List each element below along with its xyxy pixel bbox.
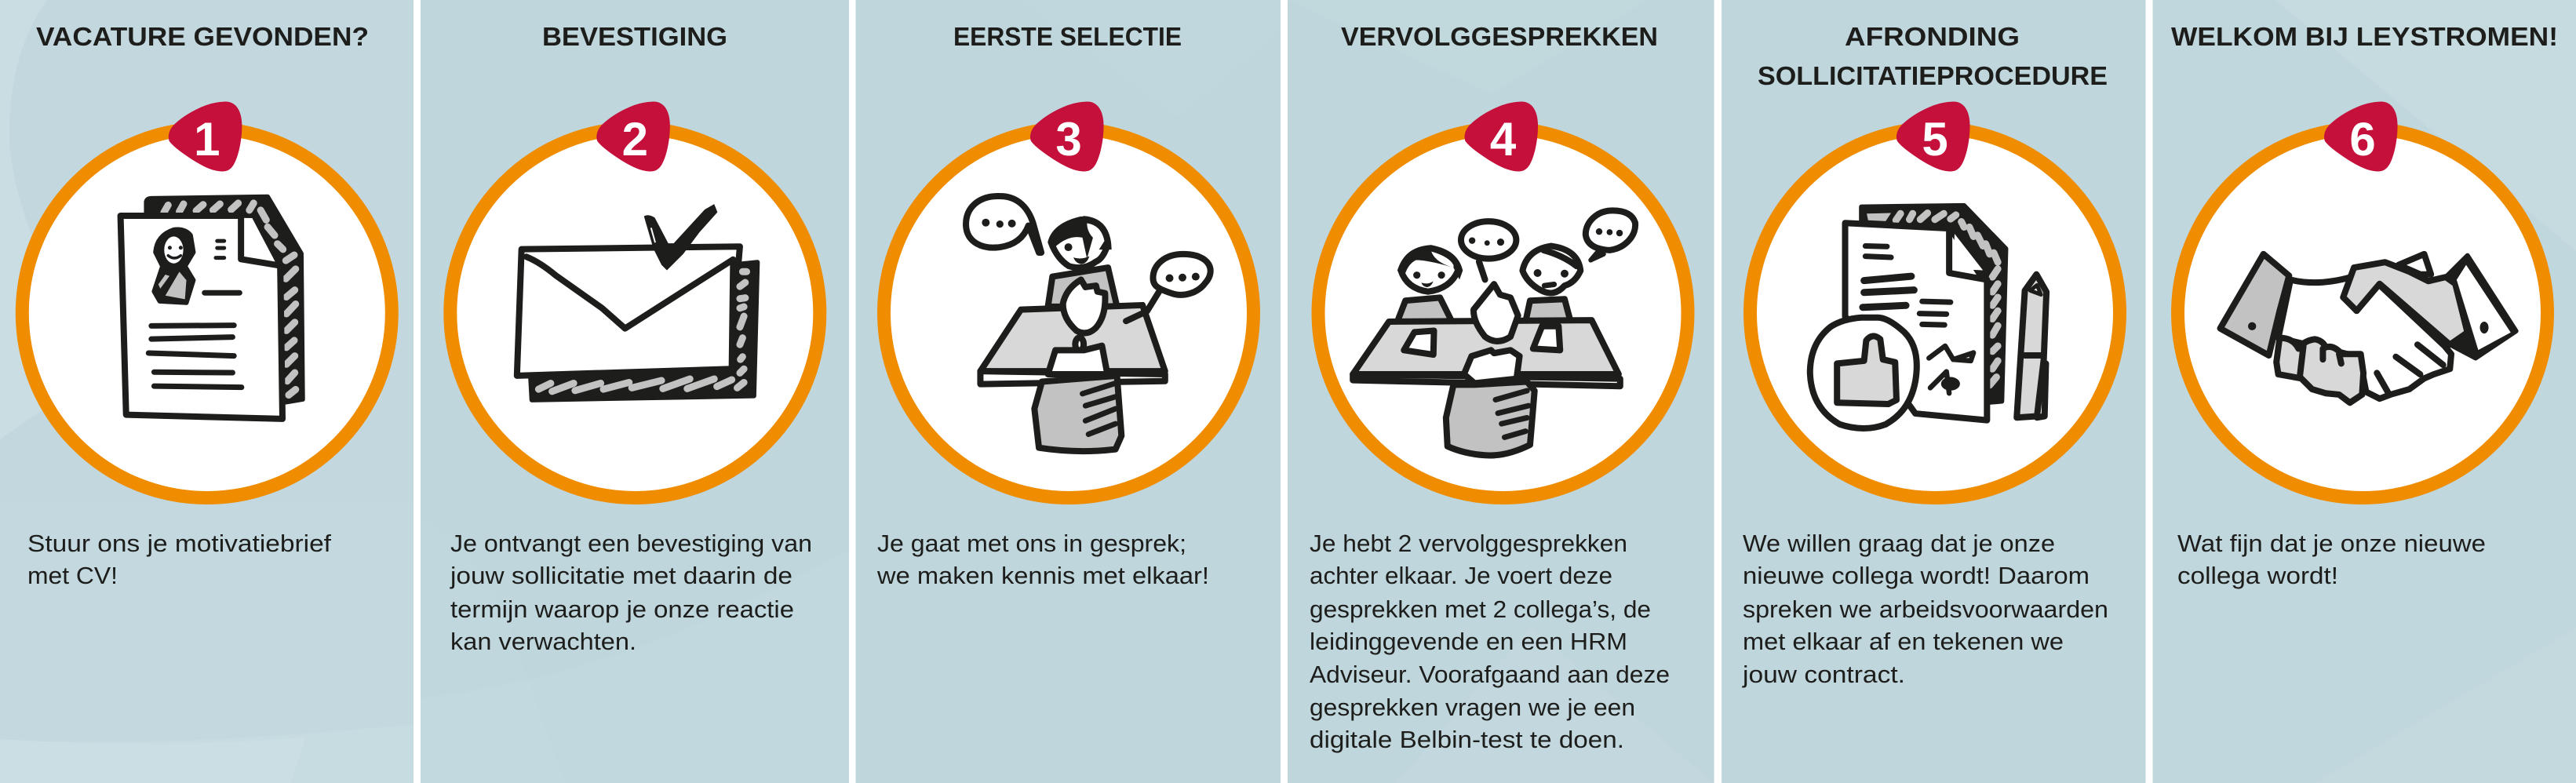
circle 2 <box>450 129 820 497</box>
panel 5: afronding sollicitatieprocedure <box>1742 22 2120 688</box>
icon: contract with thumb up and pen <box>1810 206 2046 428</box>
heading 6: WELKOM BIJ LEYSTROMEN! <box>2171 22 2558 51</box>
number badge 6 <box>2324 101 2398 172</box>
body text 6: collega wordt! <box>2177 562 2338 589</box>
circle 4 <box>1318 129 1688 497</box>
body text 3: Je gaat met ons in gesprek; <box>877 530 1186 557</box>
body text 3: we maken kennis met elkaar! <box>876 562 1209 589</box>
number badge 6: 6 <box>2349 113 2376 166</box>
body text 4: digitale Belbin-test te doen. <box>1310 726 1624 753</box>
number badge 5 <box>1896 101 1970 172</box>
body text 2: Je ontvangt een bevestiging van <box>450 530 812 557</box>
body text 4: Je hebt 2 vervolggesprekken <box>1310 530 1627 557</box>
body text 6: Wat fijn dat je onze nieuwe <box>2177 530 2486 557</box>
body text 4: Adviseur. Voorafgaand aan deze <box>1310 661 1670 688</box>
panel 3: eerste selectie <box>876 22 1254 589</box>
circle 5 <box>1750 129 2120 497</box>
number badge 3: 3 <box>1055 113 1082 166</box>
body text 3 <box>876 530 1209 589</box>
body text 6 <box>2177 530 2486 589</box>
heading 5: SOLLICITATIEPROCEDURE <box>1758 61 2108 90</box>
icon: handshake <box>2221 254 2516 402</box>
body text 1: Stuur ons je motivatiebrief <box>27 530 331 557</box>
number badge 2: 2 <box>622 113 648 166</box>
number badge 1 <box>169 101 242 172</box>
body text 5: met elkaar af en tekenen we <box>1743 628 2064 655</box>
body text 5: jouw contract. <box>1742 661 1905 688</box>
panel 2: bevestiging <box>450 22 820 655</box>
body text 2: jouw sollicitatie met daarin de <box>450 562 792 589</box>
panel 1: vacature gevonden <box>22 22 392 589</box>
circle 1 <box>22 129 392 497</box>
body text 5 <box>1742 530 2108 688</box>
number badge 4: 4 <box>1490 113 1517 166</box>
heading 1: VACATURE GEVONDEN? <box>36 22 369 51</box>
circle 6 <box>2178 129 2547 497</box>
icon: CV document <box>121 197 303 419</box>
body text 2 <box>450 530 812 655</box>
heading 4: VERVOLGGESPREKKEN <box>1341 22 1658 51</box>
icon: three people at a table <box>1353 210 1635 456</box>
circle 3 <box>884 129 1254 497</box>
body text 5: spreken we arbeidsvoorwaarden <box>1743 595 2108 623</box>
number badge 3 <box>1030 101 1104 172</box>
body text 2: termijn waarop je onze reactie <box>450 595 794 623</box>
body text 4: achter elkaar. Je voert deze <box>1310 562 1612 589</box>
panel 4: vervolggesprekken <box>1310 22 1688 753</box>
body text 5: We willen graag dat je onze <box>1743 530 2055 557</box>
body text 2: kan verwachten. <box>450 628 636 655</box>
number badge 2 <box>596 101 670 172</box>
heading 2: BEVESTIGING <box>542 22 727 51</box>
body text 4: gesprekken met 2 collega’s, de <box>1310 595 1651 623</box>
heading 3: EERSTE SELECTIE <box>953 22 1182 51</box>
number badge 4 <box>1464 101 1538 172</box>
heading 5: AFRONDING <box>1845 22 2020 51</box>
body text 1 <box>27 530 331 589</box>
body text 1: met CV! <box>27 562 118 589</box>
number badge 5: 5 <box>1922 113 1948 166</box>
body text 4 <box>1310 530 1670 753</box>
panel 6: welkom bij leystromen <box>2171 22 2558 589</box>
number badge 1: 1 <box>194 113 220 166</box>
body text 4: leidinggevende en een HRM <box>1310 628 1627 655</box>
icon: two people in conversation <box>966 196 1211 451</box>
body text 4: gesprekken vragen we je een <box>1310 694 1635 721</box>
heading 5 <box>1758 22 2108 90</box>
body text 5: nieuwe collega wordt! Daarom <box>1743 562 2090 589</box>
icon: envelope with check mark <box>517 204 757 400</box>
